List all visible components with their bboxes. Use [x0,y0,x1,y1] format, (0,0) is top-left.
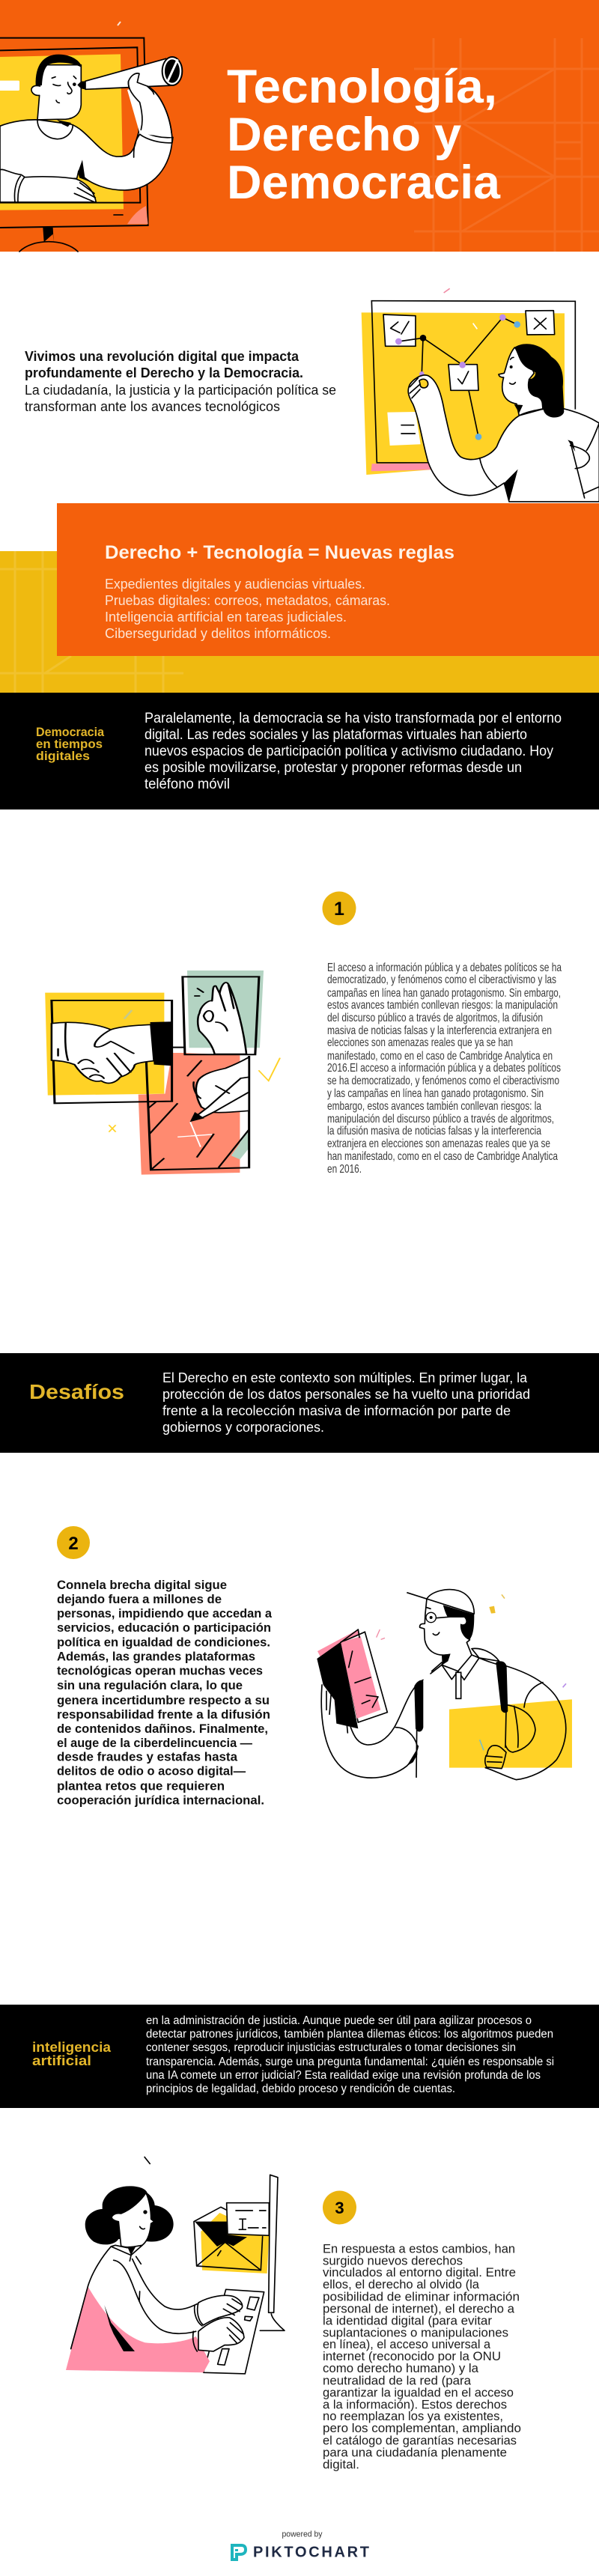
text block: desafíos: protección de los datos personales se ha vuelto una prioridad [162,1387,530,1402]
text block: introduction: La ciudadanía, la justicia y la participación política se [25,383,336,398]
text block: brecha digital: plantea retos que requieren [57,1779,225,1793]
title [227,61,501,209]
text block: brecha digital: tecnológicas operan muchas veces [57,1664,263,1677]
text block: nuevos derechos: vinculados al entorno digital. Entre [323,2266,516,2279]
sub-element: writing hand [190,1057,249,1122]
panel: desafíos [0,1353,599,1453]
heading: nuevas reglas: Derecho + Tecnología = Nuevas reglas [105,542,454,563]
badge: number 1: 1 [334,899,344,920]
text block: nuevos derechos: En respuesta a estos cambios, han [323,2242,515,2255]
illustration: man reading a book [317,1590,572,1780]
text block: nuevos derechos: no reemplazan los ya existentes, [323,2410,503,2423]
text block: brecha digital: responsabilidad frente a la difusión [57,1707,270,1722]
text block: democracia: Paralelamente, la democracia se ha visto transformada por el entorno [145,711,562,726]
text block: inteligencia artificial: detectar patrones jurídicos, también plantea dilemas éticos: los algoritmos pueden [146,2028,553,2041]
text block: democracia: digital. Las redes sociales y las plataformas virtuales han abierto [145,727,527,743]
text block: inteligencia artificial: contener sesgos, reproducir injusticias estructurales o tomar decisiones sin [146,2041,516,2054]
text block: acceso a información: en 2016. [327,1163,362,1176]
text block: brecha digital: sin una regulación clara, lo que [57,1678,243,1692]
text block: nuevos derechos: neutralidad de la red (para [323,2374,472,2387]
text block: brecha digital: personas, impidiendo que accedan a [57,1606,273,1620]
text block: inteligencia artificial: una IA comete un error judicial? Esta realidad exige una revisión profunda de los [146,2069,541,2082]
footer: powered by Piktochart [232,2530,369,2561]
list: nuevas reglas: Pruebas digitales: correos, metadatos, cámaras. [105,592,390,608]
panel: Derecho + Tecnología [57,503,599,656]
footer: powered by Piktochart: PIKTOCHART [253,2545,369,2561]
text block: nuevos derechos: en línea), el acceso universal a [323,2338,491,2351]
text block: nuevos derechos: pero los complementan, ampliando [323,2422,521,2435]
text block: nuevos derechos: ellos, el derecho al olvido (la [323,2278,480,2291]
text block: brecha digital: cooperación jurídica internacional. [57,1793,264,1808]
text block: brecha digital: Connela brecha digital sigue [57,1578,227,1592]
badge: number 3 [323,2191,356,2224]
badge: number 1 [322,891,356,926]
text block: brecha digital: el auge de la ciberdelincuencia — [57,1736,252,1750]
text block: brecha digital: Además, las grandes plataformas [57,1649,255,1664]
icon: Piktochart logo [232,2545,246,2560]
heading: inteligencia artificial: artificial [32,2053,91,2068]
heading: desafíos: Desafíos [29,1380,124,1403]
title: Derecho y [227,109,461,161]
footer: powered by Piktochart: powered by [282,2530,323,2539]
text block: nuevos derechos: la identidad digital (para evitar [323,2314,493,2327]
text block: democracia [145,711,562,792]
illustration: handshake, OK hand and writing hand [45,970,280,1175]
text block: nuevos derechos: personal de internet), el derecho a [323,2302,515,2315]
text block: nuevos derechos: internet (reconocido por la ONU [323,2350,501,2363]
illustration: woman connecting nodes on a board [362,288,599,502]
text block: democracia: es posible movilizarse, protestar y proponer reformas desde un [145,760,522,776]
text block: inteligencia artificial: principios de legalidad, debido proceso y rendición de cuentas. [146,2083,455,2095]
text block: democracia: nuevos espacios de participación política y activismo ciudadano. Hoy [145,744,553,759]
heading: inteligencia artificial [32,2040,112,2068]
text block: acceso a información: elecciones son amenazas reales que ya se han [327,1036,513,1049]
text block: nuevos derechos: suplantaciones o manipulaciones [323,2326,508,2339]
text block: brecha digital: servicios, educación o participación [57,1620,271,1635]
text block: introduction [25,349,336,414]
heading: democracia [36,726,105,763]
text block: desafíos [162,1370,530,1435]
heading: democracia: en tiempos [36,738,103,751]
text block: desafíos: gobiernos y corporaciones. [162,1420,324,1435]
text block: brecha digital: genera incertidumbre respecto a su [57,1693,270,1707]
text block: democracia: teléfono móvil [145,777,230,792]
text block: nuevos derechos: surgido nuevos derechos [323,2254,463,2267]
text block: brecha digital: desde fraudes y estafas hasta [57,1749,238,1764]
text block: introduction: Vivimos una revolución digital que impacta [25,349,300,364]
text block: nuevos derechos: el catálogo de garantías necesarias [323,2434,517,2448]
list: nuevas reglas [105,576,390,641]
text block: nuevos derechos: garantizar la igualdad en el acceso [323,2386,514,2399]
illustration: man with telescope in monitor [0,38,182,252]
title: Tecnología, [227,61,497,113]
text block: nuevos derechos: como derecho humano) y la [323,2362,479,2375]
badge: number 2 [57,1526,90,1559]
title: Democracia [227,157,501,209]
text block: nuevos derechos [323,2242,521,2471]
text block: desafíos: El Derecho en este contexto son múltiples. En primer lugar, la [162,1370,528,1385]
text block: inteligencia artificial: transparencia. Además, surge una pregunta fundamental: ¿quién es responsable si [146,2056,554,2068]
text block: brecha digital: política en igualdad de condiciones. [57,1635,270,1649]
text block: brecha digital: dejando fuera a millones de [57,1592,222,1606]
panel: yellow background band [0,551,599,693]
text block: nuevos derechos: digital. [323,2458,359,2471]
panel: inteligencia artificial [0,2005,599,2108]
text block: inteligencia artificial: en la administración de justicia. Aunque puede ser útil para agilizar procesos o [146,2014,532,2027]
text block: nuevos derechos: posibilidad de eliminar información [323,2291,520,2304]
heading: democracia: Democracia [36,726,105,739]
text block: acceso a información [327,962,562,1176]
sub-element: OK hand [195,982,246,1054]
sub-element: handshake [52,1021,172,1083]
text block: inteligencia artificial [146,2014,554,2095]
text block: nuevos derechos: a la información). Estos derechos [323,2398,507,2411]
panel: democracia en tiempos digitales [0,693,599,809]
list: nuevas reglas: Ciberseguridad y delitos informáticos. [105,625,331,641]
badge: number 3: 3 [335,2199,344,2217]
text block: introduction: transforman ante los avances tecnológicos [25,399,280,414]
heading: inteligencia artificial: inteligencia [32,2040,112,2055]
text block: nuevos derechos: para una ciudadanía plenamente [323,2446,507,2459]
list: nuevas reglas: Expedientes digitales y audiencias virtuales. [105,576,365,592]
list: nuevas reglas: Inteligencia artificial en tareas judiciales. [105,609,347,625]
badge: number 2: 2 [68,1534,79,1554]
text block: brecha digital [57,1578,273,1808]
mark: sparkle [118,22,121,25]
text block: introduction: profundamente el Derecho y la Democracia. [25,365,303,380]
illustration: woman typing at a computer [66,2157,285,2374]
heading: democracia: digitales [36,750,90,763]
panel: header banner [0,0,599,252]
text block: desafíos: frente a la recolección masiva de información por parte de [162,1403,511,1418]
text block: brecha digital: delitos de odio o acoso digital— [57,1764,246,1778]
text block: brecha digital: de contenidos dañinos. Finalmente, [57,1722,268,1736]
